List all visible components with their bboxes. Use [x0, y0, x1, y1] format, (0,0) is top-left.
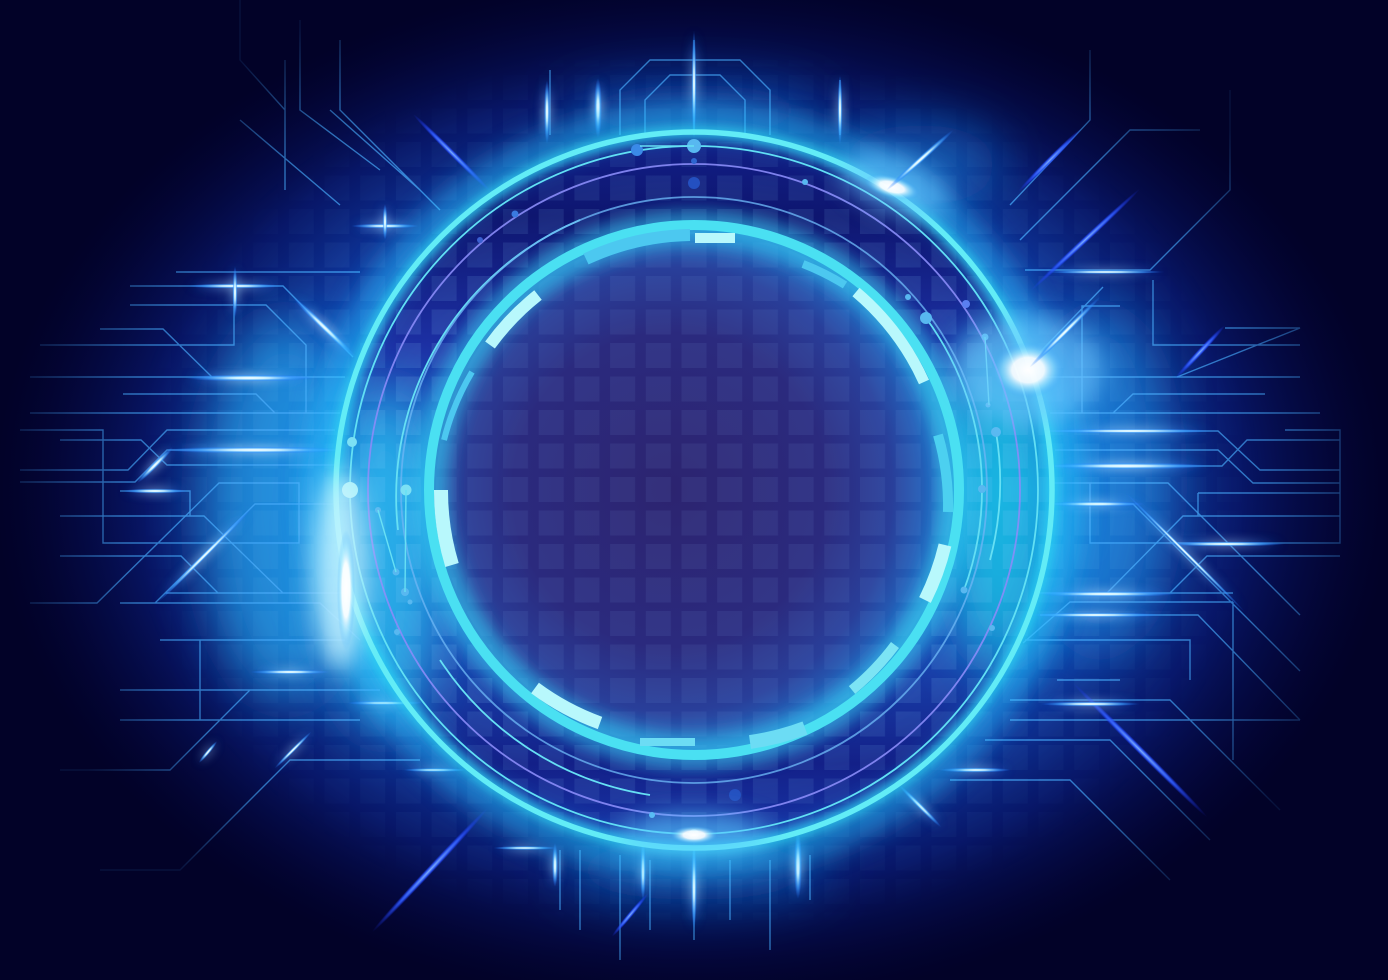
bright streaks	[123, 30, 1285, 930]
inner bright ring	[429, 225, 959, 755]
disc squares	[436, 232, 952, 748]
inner ring segment marks	[441, 235, 948, 742]
glow around outer ring	[322, 118, 1066, 862]
right traces	[1045, 377, 1340, 615]
side glows	[205, 84, 1170, 900]
central disc	[432, 228, 956, 752]
bottom traces	[560, 850, 810, 960]
lens flare: upper right	[953, 295, 1103, 425]
background pixel squares	[289, 142, 1116, 827]
outer bright ring	[336, 132, 1052, 848]
thin concentric ring lines	[350, 146, 1038, 834]
lens flare: top right	[834, 128, 956, 230]
node dots	[342, 139, 1001, 839]
lower right traces	[950, 700, 1300, 880]
left traces	[30, 272, 360, 413]
upper right traces	[1010, 50, 1300, 413]
circuit lines on band	[378, 146, 989, 592]
top traces	[550, 40, 840, 135]
bright streaks: halo	[123, 30, 1285, 930]
outer ring band	[336, 132, 1052, 848]
soft teal light at band sides	[330, 330, 1055, 730]
upper left traces	[240, 0, 440, 210]
lens flare: left	[314, 470, 366, 670]
blue streaks	[369, 112, 1227, 938]
lens flare: bottom	[619, 813, 769, 857]
